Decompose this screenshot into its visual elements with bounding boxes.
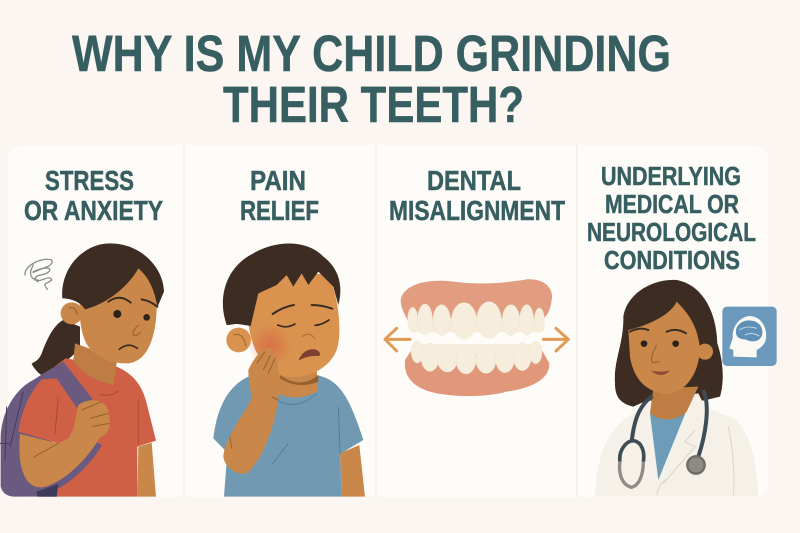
title [72,25,671,133]
heading: underlying conditions: NEUROLOGICAL [587,217,756,247]
heading: underlying conditions: UNDERLYING [601,161,741,191]
heading: dental misalignment: MISALIGNMENT [389,195,565,226]
upper teeth [408,302,544,339]
illustration: doctor with stethoscope [595,280,777,497]
panel: dental misalignment [385,165,568,396]
title: THEIR TEETH? [223,76,524,133]
icon: brain in head [722,307,777,366]
stethoscope [620,390,707,487]
icon: stress scribble [25,259,52,289]
illustration: misaligned teeth [385,279,568,396]
panel: underlying medical or neurological conditions [587,161,777,497]
panel: stress or anxiety [0,165,164,497]
illustration: worried girl with backpack [0,243,164,497]
heading: underlying conditions: CONDITIONS [604,245,740,275]
arrow: right [543,328,568,351]
upper gum [401,279,552,320]
heading: dental misalignment: DENTAL [427,165,521,196]
heading: dental misalignment [389,165,565,226]
heading: stress or anxiety: OR ANXIETY [24,195,163,226]
illustration: boy holding sore cheek [213,243,365,497]
lower gum [405,347,549,396]
title: WHY IS MY CHILD GRINDING [72,25,671,82]
heading: stress or anxiety [24,165,163,226]
heading: pain relief: PAIN [250,165,306,196]
heading: underlying conditions: MEDICAL OR [605,189,739,219]
heading: stress or anxiety: STRESS [45,165,134,196]
card background [8,145,768,497]
panel: pain relief [213,165,365,497]
lower teeth [411,341,542,374]
heading: pain relief: RELIEF [240,195,319,226]
heading: underlying conditions [587,161,756,275]
heading: pain relief [240,165,319,226]
arrow: left [385,328,410,351]
